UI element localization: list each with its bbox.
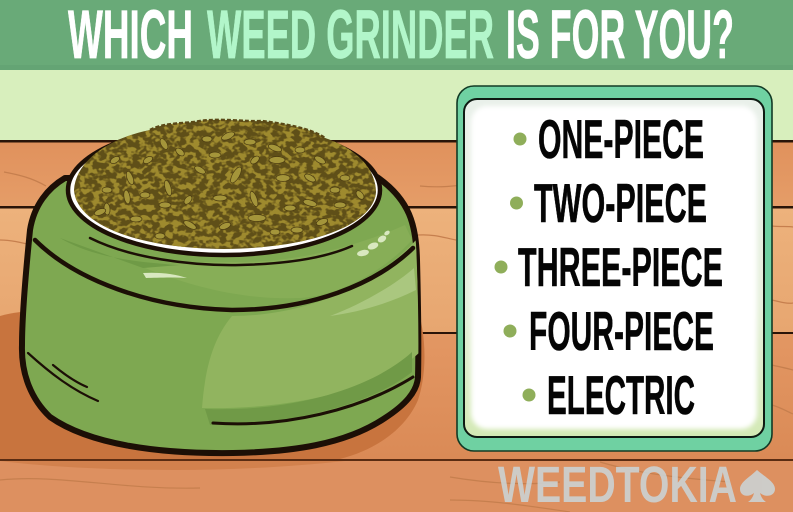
table shadow under bowl [0, 300, 424, 470]
bowl body [22, 177, 420, 453]
list item: one-piece [514, 108, 704, 170]
highlights [143, 230, 391, 278]
list item: two-piece [510, 172, 707, 234]
icon: spade [740, 470, 775, 502]
options panel [457, 86, 772, 451]
lower right line [213, 377, 413, 424]
herb mound top edge [150, 120, 325, 138]
ground herb [70, 115, 380, 255]
lower left lines [28, 353, 98, 401]
white inner rim [68, 125, 380, 255]
list item: four-piece [504, 300, 714, 362]
wooden table [0, 140, 793, 512]
rim line [35, 240, 413, 310]
card white glow [471, 106, 757, 429]
title banner [0, 0, 793, 73]
list item: three-piece [494, 236, 723, 298]
list item: electric [522, 364, 695, 426]
upper ledge line [90, 238, 352, 265]
panel frame [457, 86, 772, 451]
grinder bowl [22, 115, 420, 453]
wall background [0, 70, 793, 142]
panel card [464, 99, 764, 437]
